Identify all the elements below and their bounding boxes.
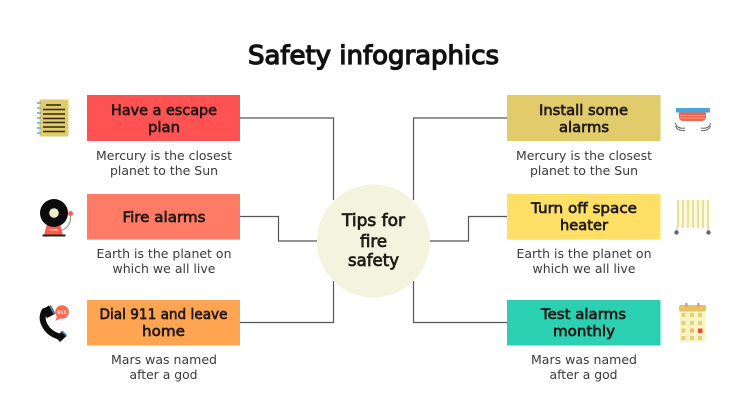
panel: have a escape plan: Mercury is the closest	[96, 149, 232, 163]
icon: fire alarm bell	[40, 199, 73, 236]
panel: dial 911 and leave home: home	[142, 324, 185, 340]
panel: have a escape plan: planet to the Sun	[110, 164, 218, 178]
icon: notepad	[37, 100, 68, 136]
panel: test alarms monthly: Test alarms	[540, 307, 626, 323]
panel: dial 911 and leave home: after a god	[130, 368, 198, 382]
icon: phone with 911 bubble	[42, 305, 69, 342]
panel: dial 911 and leave home	[87, 300, 240, 382]
panel: install some alarms: Mercury is the closest	[516, 149, 652, 163]
panel: dial 911 and leave home: Dial 911 and leave	[100, 307, 228, 323]
panel: have a escape plan: plan	[148, 120, 180, 136]
panel: test alarms monthly: after a god	[550, 368, 618, 382]
panel: turn off space heater: heater	[560, 218, 608, 234]
panel: fire alarms	[87, 194, 240, 276]
icon: radiator	[674, 200, 711, 235]
panel: have a escape plan: Have a escape	[111, 103, 217, 119]
central circle: tips for fire safety: safety	[348, 251, 399, 270]
panel: turn off space heater: Turn off space	[530, 201, 637, 217]
panel: have a escape plan	[87, 95, 240, 178]
central circle: tips for fire safety	[317, 184, 430, 298]
title: Safety infographics	[248, 41, 499, 71]
panel: install some alarms: Install some	[539, 103, 628, 119]
icon: calendar	[679, 303, 706, 342]
connector lines	[240, 118, 507, 322]
icon: smoke detector	[676, 108, 710, 131]
panel: install some alarms	[507, 95, 660, 178]
panel: turn off space heater: which we all live	[532, 262, 636, 276]
central circle: tips for fire safety: fire	[360, 232, 387, 251]
icon: phone with 911 bubble: 911	[57, 310, 67, 316]
panel: test alarms monthly	[507, 300, 660, 382]
panel: fire alarms: Fire alarms	[122, 210, 206, 226]
panel: install some alarms: planet to the Sun	[530, 164, 638, 178]
panel: test alarms monthly: monthly	[553, 324, 615, 340]
panel: turn off space heater	[507, 194, 660, 276]
central circle: tips for fire safety: Tips for	[341, 211, 405, 230]
panel: test alarms monthly: Mars was named	[531, 353, 637, 367]
panel: install some alarms: alarms	[559, 120, 609, 136]
panel: turn off space heater: Earth is the planet on	[516, 247, 652, 261]
panel: fire alarms: Earth is the planet on	[96, 247, 232, 261]
panel: dial 911 and leave home: Mars was named	[111, 353, 217, 367]
panel: fire alarms: which we all live	[112, 262, 216, 276]
